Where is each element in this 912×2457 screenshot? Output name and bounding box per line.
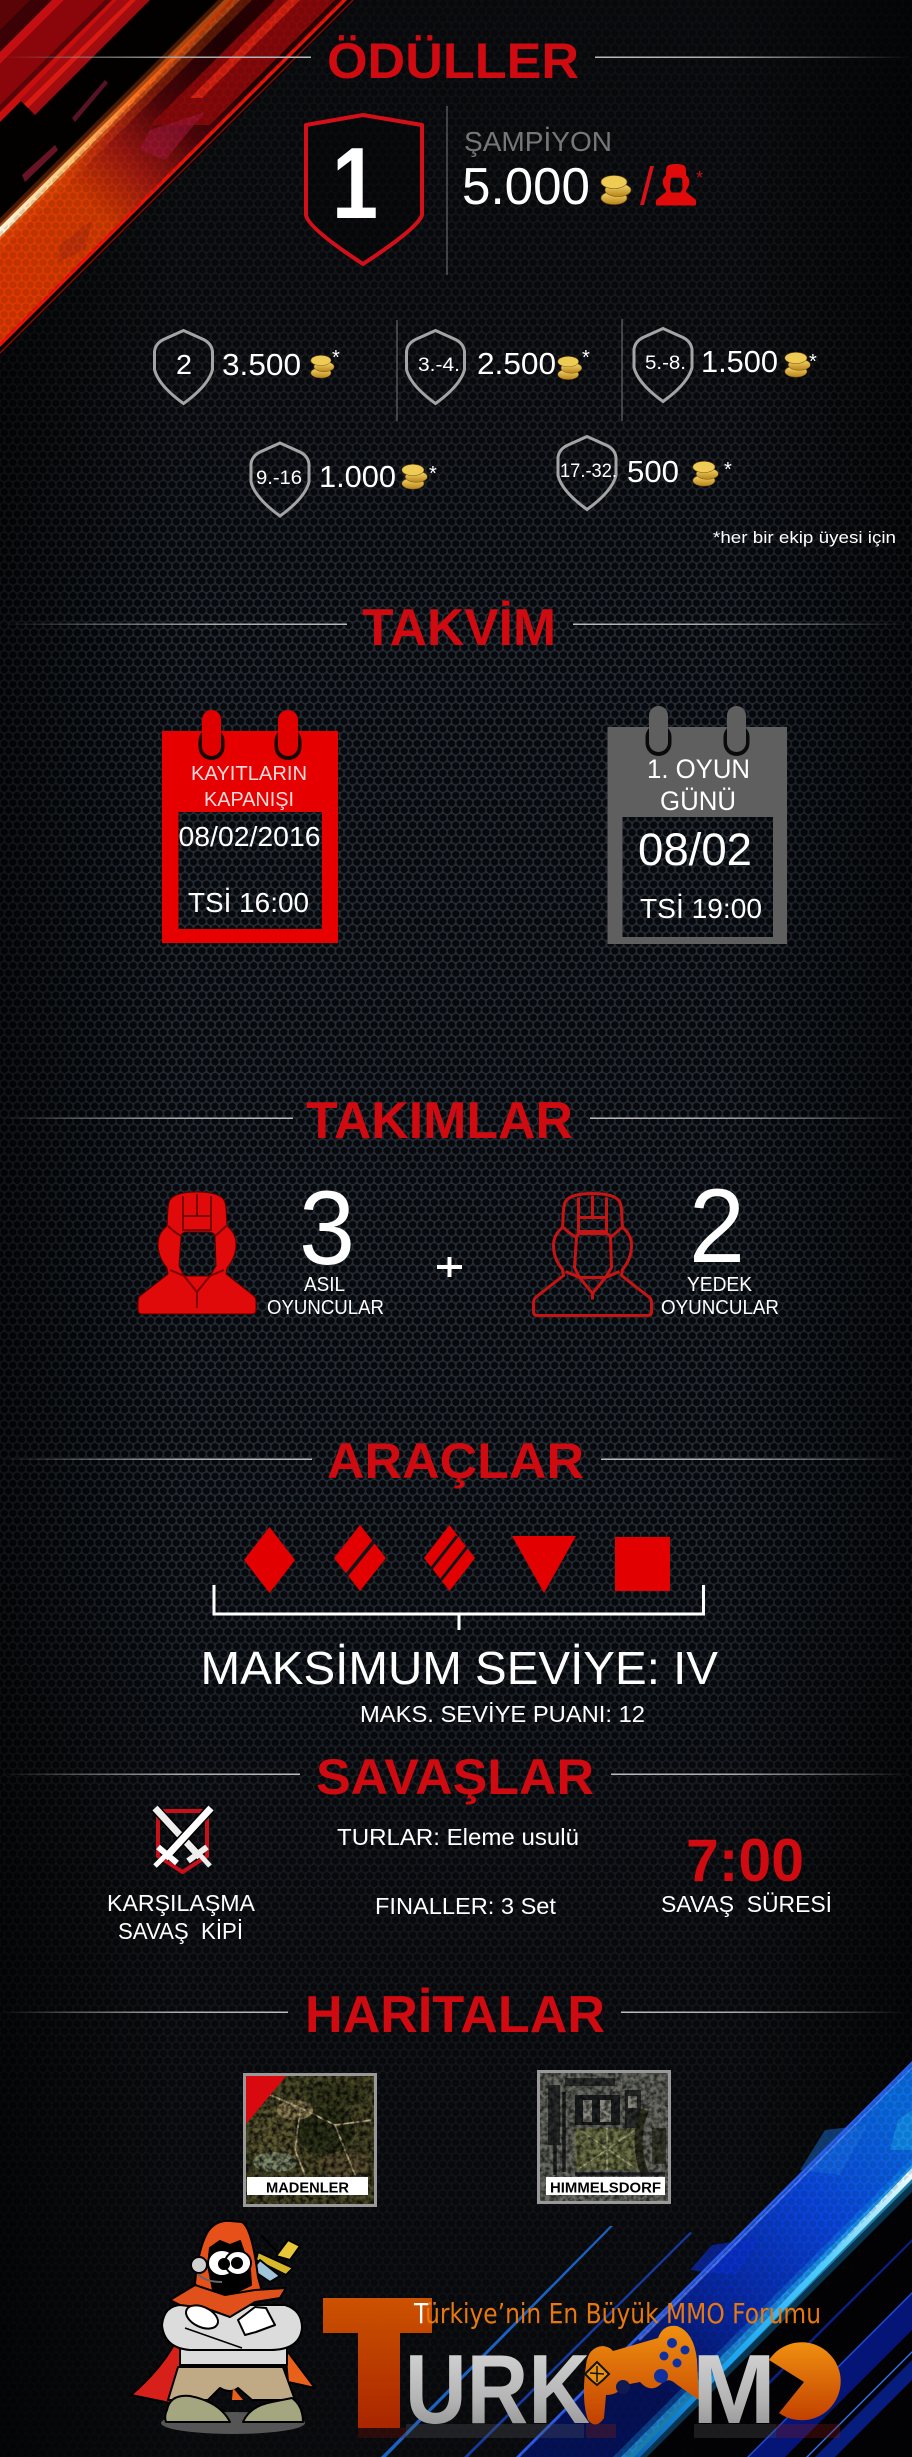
heading: ödüller: ÖDÜLLER — [327, 33, 579, 89]
number: 3: 3 — [299, 1170, 355, 1287]
prize: 2nd place — [154, 330, 340, 404]
calendar: first game day: GÜNÜ — [660, 786, 736, 816]
prize: 5th-8th place — [634, 328, 817, 402]
calendar: registration close: KAYITLARIN — [191, 763, 307, 785]
slash — [640, 166, 654, 205]
calendar: first game day: 08/02 — [638, 824, 752, 875]
icon: crossed swords — [155, 1808, 211, 1872]
label: yedek oyuncular: YEDEK — [687, 1274, 753, 1296]
map: himmelsdorf: HIMMELSDORF — [550, 2180, 661, 2196]
prize: 9th-16th place: * — [429, 463, 437, 485]
prize: 9th-16th place: 1.000 — [319, 459, 396, 494]
logo reflection — [358, 2424, 840, 2438]
heading: araçlar: ARAÇLAR — [327, 1433, 584, 1489]
champion shield — [306, 115, 422, 264]
battle duration label: SAVAŞ SÜRESİ — [661, 1891, 832, 1917]
champion label: ŞAMPİYON — [464, 126, 612, 157]
calendar: first game day: TSİ 19:00 — [640, 893, 762, 924]
heading: takımlar: TAKIMLAR — [306, 1092, 573, 1150]
battle mode label — [107, 1890, 256, 1944]
panel: araçlar — [0, 1433, 912, 1727]
prize: 3rd-4th place: * — [582, 347, 590, 369]
prize: 5th-8th place: * — [809, 351, 817, 373]
prize: 2nd place: * — [332, 347, 340, 369]
panel: ödüller — [0, 33, 912, 547]
panel: haritalar — [0, 1986, 905, 2206]
calendar: registration close: TSİ 16:00 — [188, 887, 309, 918]
logo gamepad — [584, 2326, 699, 2425]
calendar: first game day: 1. OYUN — [647, 754, 750, 784]
footnote: *her bir ekip üyesi için — [713, 528, 896, 547]
panel: takvim — [0, 599, 912, 944]
battle mode label: SAVAŞ KİPİ — [118, 1918, 243, 1944]
prize: 3rd-4th place: 3.-4. — [418, 355, 460, 376]
finals: FINALLER: 3 Set — [375, 1893, 557, 1919]
champion prize: 5.000 — [462, 158, 590, 216]
label: asıl oyuncular — [267, 1274, 384, 1319]
plus sign — [437, 1257, 462, 1277]
prize: 9th-16th place — [251, 443, 437, 516]
prize: 9th-16th place: 9.-16 — [256, 468, 302, 489]
prize: 3rd-4th place: 2.500 — [477, 346, 556, 381]
label: asıl oyuncular: ASIL — [304, 1274, 345, 1296]
icon: filled tanker — [138, 1192, 256, 1314]
prize: 2nd place: 2 — [176, 349, 192, 380]
calendar: registration close: KAPANIŞI — [204, 789, 294, 811]
label: yedek oyuncular — [661, 1274, 779, 1319]
map: himmelsdorf — [538, 2072, 670, 2202]
icon: medium tank — [334, 1525, 386, 1591]
logo letters URK: URK — [405, 2334, 590, 2444]
champion shield: 1 — [332, 128, 378, 240]
decorative red diagonal streaks — [0, 0, 355, 355]
icon: heavy tank — [424, 1525, 475, 1591]
calendar: registration close: 08/02/2016 — [178, 821, 320, 852]
number: 2: 2 — [689, 1168, 745, 1285]
asterisk: * — [696, 168, 703, 188]
logo letter M: M — [692, 2334, 776, 2444]
heading: savaşlar: SAVAŞLAR — [316, 1749, 594, 1805]
decorative blue diagonal streaks — [381, 2060, 912, 2457]
prize: 17th-32nd place: 17.-32. — [560, 461, 617, 482]
bracket — [214, 1585, 704, 1630]
icon: gold coins — [601, 176, 631, 204]
map: madenler: MADENLER — [266, 2180, 349, 2196]
logo letter O as pacman — [769, 2342, 841, 2420]
calendar: first game day — [608, 706, 787, 944]
logo: turkmmo — [323, 2297, 841, 2444]
calendar: registration close — [162, 710, 338, 943]
panel: takımlar — [0, 1092, 912, 1319]
heading: haritalar: HARİTALAR — [305, 1986, 605, 2044]
icon: tank destroyer — [512, 1536, 576, 1593]
prize: 5th-8th place: 5.-8. — [645, 353, 686, 374]
prize: 17th-32nd place: * — [724, 459, 732, 481]
max tier points: MAKS. SEVİYE PUANI: 12 — [360, 1701, 645, 1727]
icon: artillery — [615, 1537, 670, 1591]
map: madenler — [244, 2074, 376, 2206]
max tier: MAKSİMUM SEVİYE: IV — [200, 1642, 718, 1694]
rounds: TURLAR: Eleme usulü — [337, 1824, 579, 1850]
prize: 17th-32nd place: 500 — [627, 454, 679, 489]
prize: 3rd-4th place — [406, 330, 590, 404]
logo tagline: Türkiye’nin En Büyük MMO Forumu — [413, 2297, 821, 2330]
icon: outlined tanker — [534, 1194, 652, 1316]
panel: savaşlar — [0, 1749, 912, 1944]
logo letter T — [323, 2298, 432, 2428]
mascot — [131, 2221, 315, 2434]
icon: tanker reward — [656, 164, 696, 205]
prize: 5th-8th place: 1.500 — [701, 344, 778, 379]
prize: 2nd place: 3.500 — [222, 347, 301, 382]
battle duration: 7:00 — [686, 1827, 804, 1894]
icon: light tank — [244, 1527, 295, 1593]
heading: takvim: TAKVİM — [362, 599, 556, 657]
label: yedek oyuncular: OYUNCULAR — [661, 1297, 779, 1319]
prize: 17th-32nd place — [558, 436, 732, 510]
label: asıl oyuncular: OYUNCULAR — [267, 1297, 384, 1319]
battle mode label: KARŞILAŞMA — [107, 1890, 256, 1916]
